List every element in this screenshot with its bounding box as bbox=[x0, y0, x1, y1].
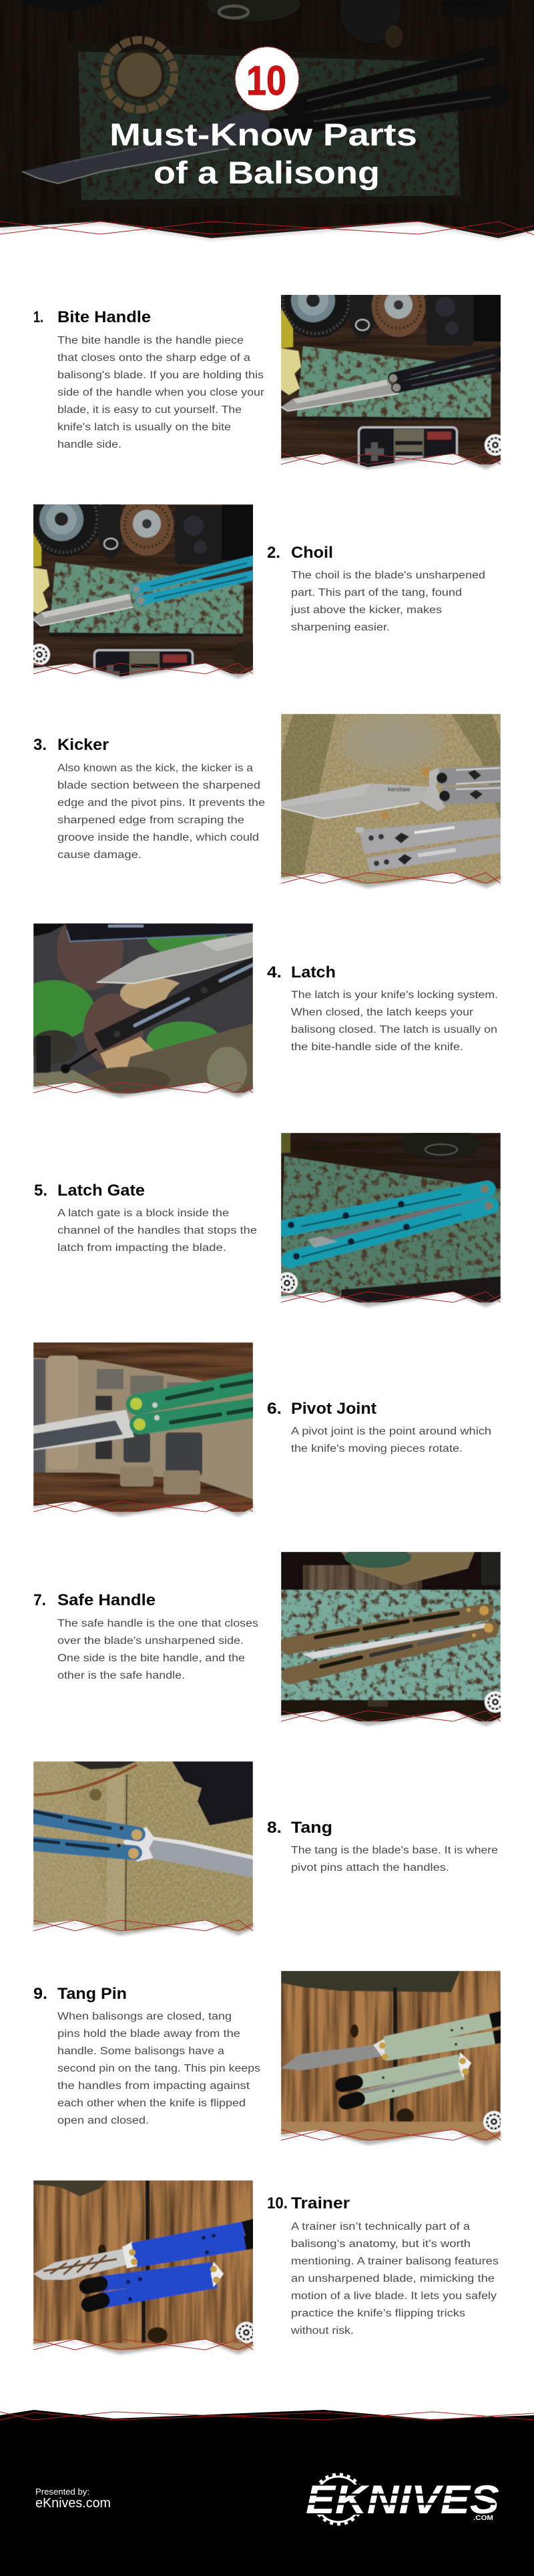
text: Tang Pin description: pins hold the blade away from the bbox=[57, 2028, 240, 2040]
panel: 2 Choil bbox=[32, 504, 485, 680]
photo: bronze balisong on teal patina bbox=[281, 1547, 506, 1726]
presented by text: Presented by: bbox=[35, 2487, 89, 2497]
text: Latch Gate description: A latch gate is a block inside the bbox=[57, 1208, 229, 1219]
photo: carbon fibre balisong on camouflage bbox=[32, 923, 255, 1099]
text: Latch Gate description: channel of the handles that stops the bbox=[57, 1225, 257, 1236]
text: Kicker description: blade section between the sharpened bbox=[57, 780, 260, 791]
panel: 10 Trainer bbox=[33, 2180, 499, 2354]
text: Latch Gate description: latch from impacting the blade. bbox=[57, 1242, 226, 1254]
panel: 3 Kicker bbox=[33, 713, 505, 888]
text: Trainer description: motion of a live blade. It lets you safely bbox=[291, 2290, 497, 2302]
heading: Safe Handle: Safe Handle bbox=[57, 1591, 156, 1609]
heading: Pivot Joint: Pivot Joint bbox=[291, 1400, 376, 1418]
text: Pivot Joint description: A pivot joint is the point around which bbox=[291, 1426, 491, 1437]
panel: 9 Tang Pin bbox=[33, 1971, 505, 2145]
photo: teal balisong closed on rusty tin bbox=[276, 1128, 501, 1307]
text: Tang Pin description bbox=[57, 2011, 260, 2126]
text: Safe Handle description: over the blade's unsharpened side. bbox=[57, 1635, 244, 1647]
panel: 5 Latch Gate bbox=[34, 1128, 501, 1307]
photo: black handled balisong on green tin bbox=[280, 295, 502, 470]
heading: Tang: 8. bbox=[267, 1819, 282, 1837]
text: Tang description bbox=[291, 1845, 498, 1873]
text: Choil description: just above the kicker, makes bbox=[290, 604, 442, 616]
text: Bite Handle description: that closes onto the sharp edge of a bbox=[57, 352, 250, 364]
text: Pivot Joint description bbox=[291, 1426, 491, 1454]
text: Kicker description: sharpened edge from scraping the bbox=[57, 815, 244, 826]
text: Latch description: The latch is your knife's locking system. bbox=[291, 989, 498, 1001]
badge: number 10: 10 bbox=[246, 58, 286, 104]
heading: Kicker: Kicker bbox=[57, 736, 109, 754]
footer red zigzag lines bbox=[0, 2412, 534, 2420]
text: Bite Handle description: balisong's blade. If you are holding this bbox=[57, 370, 264, 381]
text: Tang Pin description: each other when the knife is flipped bbox=[57, 2098, 246, 2109]
text: Tang description: pivot pins attach the handles. bbox=[291, 1862, 449, 1873]
heading: Latch: 4. bbox=[267, 963, 282, 981]
text: Safe Handle description bbox=[57, 1618, 258, 1681]
text: Tang Pin description: the handles from impacting against bbox=[57, 2080, 250, 2092]
heading: Tang Pin: Tang Pin bbox=[57, 1985, 127, 2003]
title: of a Balisong bbox=[154, 155, 380, 190]
text: Trainer description: practice the knife’s flipping tricks bbox=[291, 2308, 465, 2319]
text: Safe Handle description: One side is the bite handle, and the bbox=[57, 1653, 245, 1664]
logo: eKnives: EKNIVES bbox=[306, 2477, 499, 2522]
panel: 4 Latch bbox=[32, 923, 497, 1099]
text: Tang Pin description: handle. Some balisongs have a bbox=[57, 2046, 224, 2057]
text: Kicker description: Also known as the kick, the kicker is a bbox=[57, 763, 253, 774]
text: Kicker description: cause damage. bbox=[57, 849, 142, 861]
text: Bite Handle description: knife's latch is usually on the bite bbox=[57, 422, 231, 433]
heading: Trainer bbox=[267, 2194, 350, 2212]
text: Kicker description: edge and the pivot pins. It prevents the bbox=[57, 797, 265, 809]
heading: Tang Pin: 9. bbox=[33, 1985, 47, 2003]
text: Tang Pin description: second pin on the tang. This pin keeps bbox=[57, 2063, 260, 2074]
heading: Latch Gate: Latch Gate bbox=[57, 1182, 145, 1200]
text: Trainer description: an unsharpened blade, mimicking the bbox=[291, 2273, 495, 2284]
heading: Latch: Latch bbox=[291, 963, 336, 981]
text: Trainer description: without risk. bbox=[290, 2325, 354, 2336]
heading: Tang bbox=[267, 1819, 332, 1837]
panel: 1 Bite Handle bbox=[34, 295, 502, 470]
heading: Choil: Choil bbox=[291, 544, 333, 562]
footer panel bbox=[0, 2410, 534, 2576]
heading: Kicker: 3. bbox=[33, 736, 47, 754]
text: Choil description: sharpening easier. bbox=[291, 622, 390, 633]
heading: Trainer: 10. bbox=[267, 2194, 288, 2212]
text: Trainer description: balisong’s anatomy, but it’s worth bbox=[291, 2238, 471, 2250]
text: Tang Pin description: When balisongs are closed, tang bbox=[57, 2011, 232, 2022]
text: Safe Handle description: The safe handle is the one that closes bbox=[57, 1618, 258, 1629]
heading: Kicker bbox=[33, 736, 109, 754]
heading: Bite Handle: Bite Handle bbox=[57, 308, 151, 326]
heading: Safe Handle: 7. bbox=[33, 1591, 46, 1609]
heading: Bite Handle: 1. bbox=[33, 308, 43, 326]
text: Pivot Joint description: the knife's moving pieces rotate. bbox=[291, 1443, 463, 1454]
heading: Latch Gate: 5. bbox=[34, 1182, 47, 1200]
photo: silver Kershaw balisong on canvas: kershaw bbox=[388, 786, 411, 793]
title: Must-Know Parts bbox=[109, 117, 417, 152]
text: Kicker description: groove inside the handle, which could bbox=[57, 832, 259, 843]
header red zigzag lines bbox=[0, 222, 534, 235]
photo: jade handled balisongs on wood bbox=[281, 1971, 505, 2145]
photo: teal handled balisong on green tin bbox=[32, 504, 255, 680]
badge: number 10 bbox=[235, 47, 299, 111]
text: Trainer description bbox=[290, 2221, 499, 2336]
text: Bite Handle description: handle side. bbox=[57, 439, 121, 450]
text: Latch description: balisong closed. The latch is usually on bbox=[291, 1024, 497, 1035]
text: Choil description bbox=[290, 570, 485, 633]
text: Latch Gate description bbox=[57, 1208, 257, 1254]
text: Trainer description: mentioning. A trainer balisong features bbox=[291, 2256, 499, 2267]
logo: eKnives: .COM bbox=[473, 2515, 493, 2522]
presented by text: eKnives.com bbox=[35, 2496, 111, 2511]
header photo: knife on rusty tin bbox=[0, 0, 534, 240]
text: Latch description: When closed, the latch keeps your bbox=[291, 1007, 473, 1018]
presented by text bbox=[35, 2487, 111, 2511]
text: Bite Handle description: side of the handle when you close your bbox=[57, 387, 264, 398]
text: Latch description bbox=[291, 989, 498, 1053]
photo: green balisong on tan magazine bbox=[33, 1342, 260, 1517]
photo: blue balisong on khaki canvas bbox=[30, 1761, 253, 1936]
text: Choil description: part. This part of the tang, found bbox=[291, 587, 462, 598]
title bbox=[109, 117, 417, 190]
text: Tang Pin description: open and closed. bbox=[57, 2115, 149, 2126]
photo: silver Kershaw balisong on canvas bbox=[281, 713, 505, 888]
text: Safe Handle description: other is the safe handle. bbox=[57, 1670, 185, 1681]
text: Bite Handle description: The bite handle is the handle piece bbox=[57, 335, 244, 346]
heading: Choil bbox=[267, 544, 333, 562]
heading: Choil: 2. bbox=[267, 544, 280, 562]
heading: Trainer: Trainer bbox=[291, 2194, 350, 2212]
text: Trainer description: A trainer isn’t technically part of a bbox=[291, 2221, 470, 2232]
panel: 6 Pivot Joint bbox=[33, 1342, 491, 1517]
text: Bite Handle description: blade, it is easy to cut yourself. The bbox=[57, 404, 242, 416]
photo: blue trainer balisongs on wood bbox=[33, 2180, 257, 2354]
text: Latch description: the bite-handle side of the knife. bbox=[291, 1041, 463, 1053]
header panel bbox=[0, 0, 534, 240]
panel: 8 Tang bbox=[30, 1761, 498, 1936]
text: Bite Handle description bbox=[57, 335, 264, 450]
text: Choil description: The choil is the blade's unsharpened bbox=[291, 570, 485, 581]
text: Kicker description bbox=[57, 763, 265, 861]
panel: 7 Safe Handle bbox=[33, 1547, 506, 1726]
heading: Pivot Joint: 6. bbox=[267, 1400, 282, 1418]
text: Tang description: The tang is the blade's base. It is where bbox=[291, 1845, 498, 1856]
heading: Tang: Tang bbox=[291, 1819, 332, 1837]
heading: Latch bbox=[267, 963, 336, 981]
